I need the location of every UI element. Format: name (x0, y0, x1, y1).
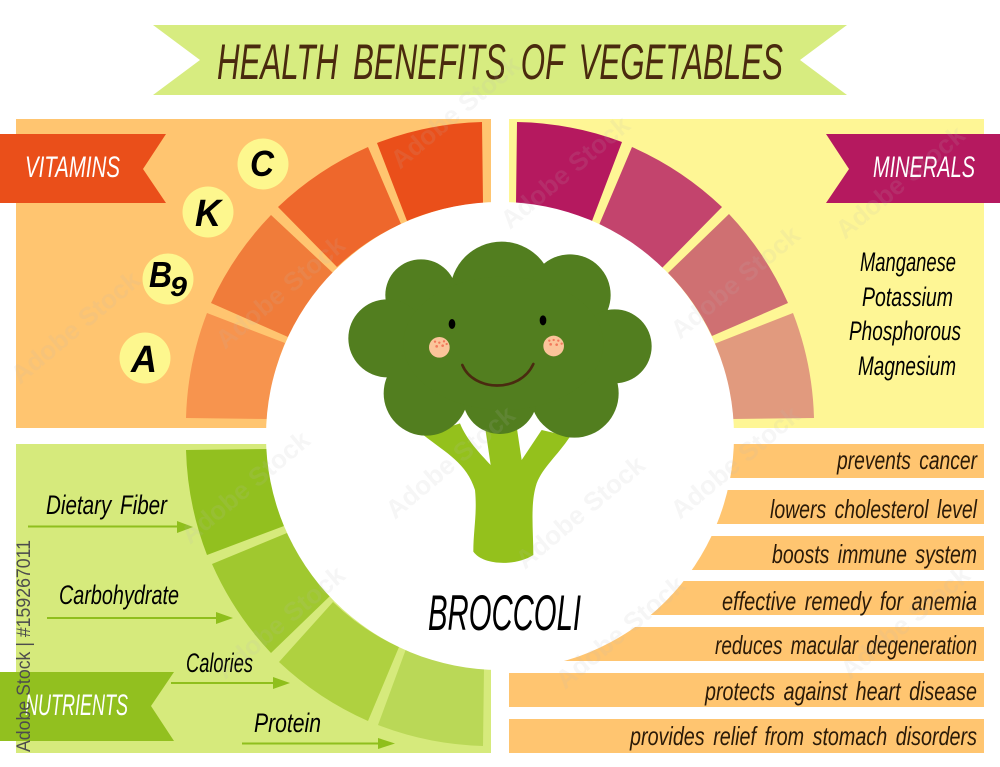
label: dietary fiber: Dietary Fiber (46, 490, 168, 520)
vitamin badges: C (250, 143, 275, 184)
label: dietary fiber (28, 490, 193, 533)
vitamin badges: A (130, 339, 157, 381)
ribbon: nutrients (0, 672, 174, 741)
label: carbohydrate: Carbohydrate (59, 580, 179, 610)
center white circle (266, 202, 734, 670)
icon: broccoli character (348, 242, 652, 563)
label: calories: Calories (186, 648, 253, 678)
watermark pattern: Adobe Stock (175, 424, 316, 550)
benefits text (629, 445, 978, 751)
watermark pattern: Adobe Stock (665, 219, 806, 345)
ribbon: nutrients: NUTRIENTS (25, 689, 128, 722)
watermark pattern: Adobe Stock (665, 399, 806, 525)
watermark pattern: Adobe Stock (380, 399, 521, 525)
panel: nutrients (16, 444, 491, 753)
label: protein: Protein (254, 708, 321, 738)
vitamin badges: B (149, 254, 172, 295)
watermark pattern: Adobe Stock (5, 264, 146, 390)
ribbon: vitamins: VITAMINS (25, 151, 120, 184)
ribbon: vitamins (0, 134, 166, 203)
product name: BROCCOLI (428, 585, 581, 641)
watermark pattern: Adobe Stock (210, 559, 351, 685)
vertical stock credit: Adobe Stock | #159267011 (14, 540, 35, 752)
watermark pattern: Adobe Stock (835, 559, 976, 685)
watermark pattern: Adobe Stock (385, 49, 526, 175)
panel: vitamins (16, 119, 491, 428)
broccoli head (348, 242, 652, 438)
vitamin badges (120, 138, 288, 384)
benefit bars (509, 444, 984, 753)
minerals list (849, 247, 961, 381)
minerals list: Potassium (862, 282, 953, 312)
vitamin badges: 9 (170, 271, 187, 302)
vitamins arc segments (186, 122, 483, 419)
nutrients arc segments (186, 449, 484, 746)
watermark pattern: Adobe Stock (550, 569, 691, 695)
watermark pattern: Adobe Stock (495, 109, 636, 235)
vitamin badges: K (195, 193, 223, 235)
ribbon: minerals (826, 134, 1000, 203)
minerals list: Magnesium (858, 351, 956, 381)
watermark pattern: Adobe Stock (830, 119, 971, 245)
watermark pattern: Adobe Stock (510, 449, 651, 575)
watermark pattern: Adobe Stock (210, 229, 351, 355)
panel: minerals (509, 119, 984, 428)
broccoli stem (423, 423, 570, 563)
face (429, 315, 564, 385)
label: protein (242, 708, 395, 749)
label: calories (171, 648, 290, 689)
minerals arc segments (516, 122, 814, 419)
label: carbohydrate (47, 580, 233, 624)
minerals list: Manganese (860, 247, 956, 277)
title banner (153, 25, 847, 95)
